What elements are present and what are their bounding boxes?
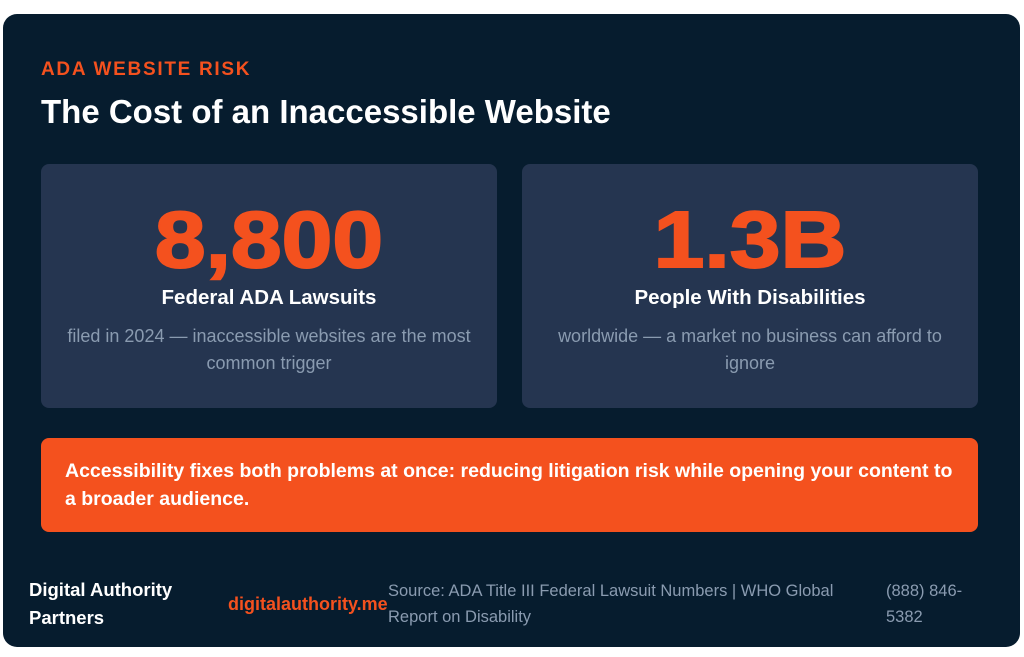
footer: phone: (888) 846-: [886, 582, 962, 600]
stat number: 8,800: [155, 195, 383, 284]
eyebrow label: ADA WEBSITE RISK: [41, 59, 251, 80]
stat number: 1.3B: [654, 195, 846, 284]
callout: Accessibility fixes both problems at once: reducing litigation risk while opening your content to: [65, 460, 952, 482]
callout: [41, 438, 978, 532]
footer: phone: [886, 582, 962, 626]
footer: phone: 5382: [886, 608, 923, 626]
footer: source: Source: ADA Title III Federal Lawsuit Numbers | WHO Global Report on Disability: [388, 582, 833, 626]
title: The Cost of an Inaccessible Website: [41, 93, 611, 130]
stat description: worldwide — a market no business can afford to ignore: [558, 326, 942, 373]
callout: a broader audience.: [65, 488, 249, 510]
stat description: filed in 2024 — inaccessible websites are the most common trigger: [67, 326, 471, 373]
panel: lawsuits: [41, 164, 497, 408]
stat label: People With Disabilities: [634, 286, 866, 309]
panel: disabilities: [522, 164, 978, 408]
footer: company name: Digital Authority Partners: [29, 579, 172, 628]
footer: website: digitalauthority.me: [228, 594, 388, 614]
stat label: Federal ADA Lawsuits: [162, 286, 376, 309]
